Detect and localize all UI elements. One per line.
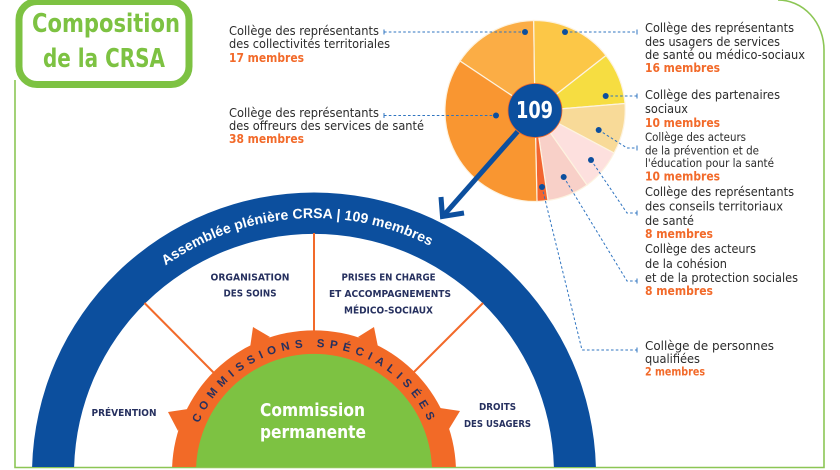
label: droits des usagers: DROITS [479,402,516,413]
label: usagers [645,20,805,75]
leader line: cohésion sociale [561,174,637,284]
leader line: usagers [562,29,637,35]
label: prévention et éducation: 10 membres [645,168,720,184]
title box: de la CRSA [43,44,165,74]
plenary assembly ring: Assemblée plénière CRSA | 109 membres [163,208,432,266]
label: offreurs des services de santé: Collège des représentants [229,105,379,120]
pie centre total [508,84,562,138]
label: prévention et éducation: Collège des acteurs [645,130,746,144]
label: personnes qualifiées: 2 membres [645,364,705,378]
label: usagers: Collège des représentants [645,20,794,35]
standing commission dome: permanente [260,423,366,443]
label: cohésion et protection sociales: Collège des acteurs [645,241,756,256]
pie centre total: 109 [516,98,553,124]
label: personnes qualifiées: qualifiées [645,351,700,366]
leader line: partenaires sociaux [603,93,637,99]
label: organisation des soins: ORGANISATION [210,272,290,284]
label: prises en charge [329,272,451,316]
specialised commissions band with spikes [168,327,460,467]
spokes between commissions [144,233,483,373]
label: organisation des soins [210,272,290,300]
label: personnes qualifiées [645,338,774,378]
label: partenaires sociaux [645,87,780,130]
label: collectivités territoriales: 17 membres [229,50,304,65]
label: cohésion et protection sociales: de la cohésion [645,256,727,271]
label: prises en charge: MÉDICO-SOCIAUX [344,304,433,316]
label: partenaires sociaux: 10 membres [645,115,720,130]
title box: Composition [32,9,180,39]
pie chart: composition by college [445,20,625,202]
label: personnes qualifiées: Collège de personnes [645,338,774,353]
label: partenaires sociaux: sociaux [645,101,688,116]
arrow from pie to plenary assembly [441,130,519,216]
label: prises en charge: ET ACCOMPAGNEMENTS [329,289,451,300]
label: prévention et éducation: l'éducation pour la santé [645,156,774,170]
label: organisation des soins: DES SOINS [224,288,276,300]
standing commission dome [196,354,432,467]
label: collectivités territoriales: des collectivités territoriales [229,36,390,51]
specialised commissions band with spikes: COMMISSIONS SPÉCIALISÉES [192,339,434,422]
label: conseils territoriaux: des conseils territoriaux [645,198,783,214]
leader line: collectivités territoriales [384,29,528,35]
title box [19,2,189,84]
label: offreurs des services de santé [229,105,424,146]
label: partenaires sociaux: Collège des partenaires [645,87,780,102]
label: offreurs des services de santé: des offreurs des services de santé [229,118,424,133]
label: conseils territoriaux [645,184,794,241]
label: droits des usagers: DES USAGERS [464,419,531,430]
label: cohésion et protection sociales: 8 membres [645,283,713,298]
leader line: prévention [596,127,637,150]
label: prévention et éducation: de la prévention et de [645,144,759,158]
label: collectivités territoriales: Collège des représentants [229,23,379,38]
label: prévention: PRÉVENTION [92,406,156,419]
standing commission dome: Commission [260,401,365,421]
leader line: personnes qualifiées [539,184,637,352]
label: conseils territoriaux: 8 membres [645,226,713,241]
label: prévention et éducation [645,130,774,184]
label: conseils territoriaux: Collège des représentants [645,184,794,199]
label: offreurs des services de santé: 38 membres [229,131,304,146]
label: usagers: des usagers de services [645,34,780,49]
label: droits des usagers [464,402,531,430]
label: prises en charge: PRISES EN CHARGE [342,272,436,284]
leader line: offreurs [384,112,499,118]
label: cohésion et protection sociales [645,241,798,298]
label: cohésion et protection sociales: et de la protection sociales [645,270,798,285]
label: usagers: 16 membres [645,60,720,75]
label: conseils territoriaux: de santé [645,213,694,228]
label: collectivités territoriales [229,23,390,65]
label: usagers: de santé ou médico-sociaux [645,47,805,62]
leader line: conseils territoriaux [588,157,637,216]
